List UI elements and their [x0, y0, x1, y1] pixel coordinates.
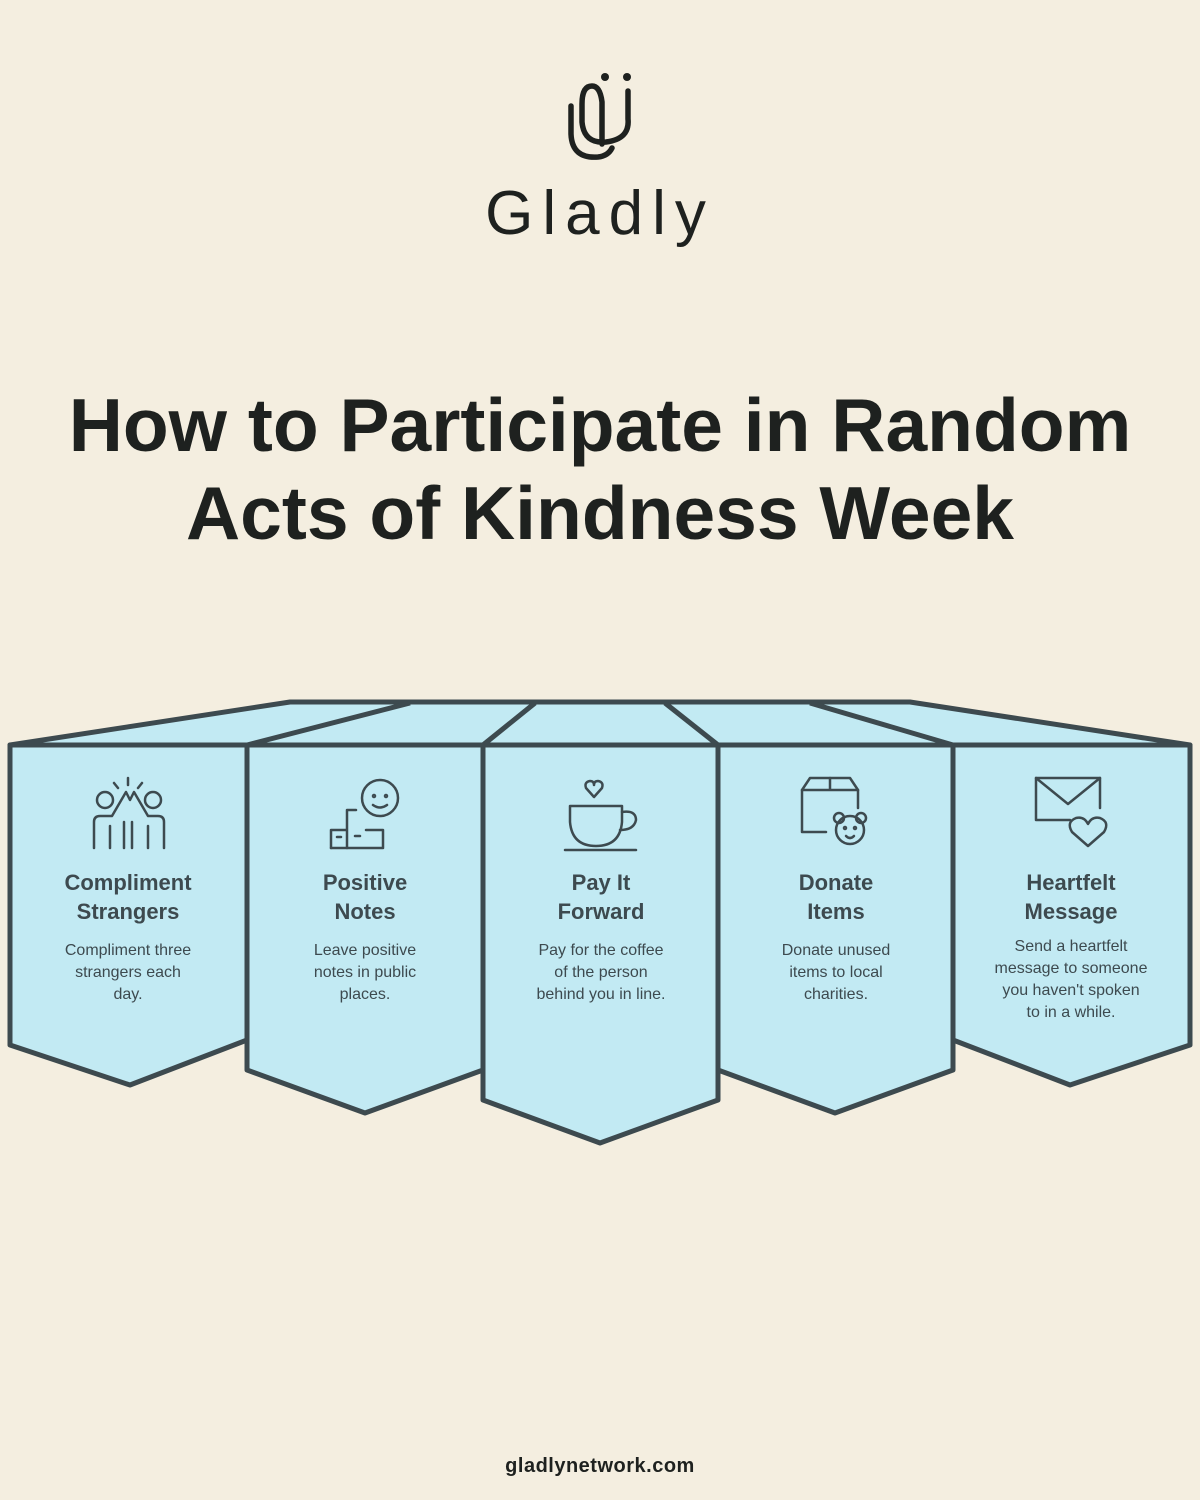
card 4 text	[782, 870, 890, 1003]
panel 3	[483, 745, 718, 1143]
title	[69, 383, 1131, 555]
card 5 text: Send a heartfelt	[1015, 938, 1127, 955]
logo mark	[568, 73, 631, 160]
card 3 text	[536, 870, 665, 1003]
panel 4	[718, 745, 953, 1113]
card 1 text: Compliment	[64, 870, 192, 895]
panel 2	[247, 745, 483, 1113]
card 2 text: Notes	[334, 899, 396, 924]
top surface	[10, 702, 1190, 745]
icon: coffee	[565, 781, 636, 850]
card 1 text: Compliment three	[65, 942, 191, 959]
card 1 text: day.	[113, 986, 143, 1003]
footer url: gladlynetwork.com	[505, 1455, 695, 1477]
icon: smiley note	[331, 780, 398, 848]
icon: donate box bear	[802, 778, 866, 844]
brand name: Gladly	[485, 179, 715, 248]
panel 1	[10, 745, 247, 1085]
icon: high five	[94, 778, 164, 848]
title: How to Participate in Random	[69, 383, 1131, 467]
card 5 text: Message	[1025, 899, 1117, 924]
card 4 text: Items	[807, 899, 865, 924]
card 3 text: Pay for the coffee	[538, 942, 664, 959]
card 3 text: of the person	[554, 964, 648, 981]
card 2 text: notes in public	[314, 964, 416, 981]
card 5 text: you haven't spoken	[1002, 982, 1140, 999]
card 2 text	[314, 870, 416, 1003]
card 3 text: Pay It	[572, 870, 630, 895]
card 4 text: Donate unused	[782, 942, 890, 959]
panels graphic	[8, 700, 1192, 1146]
card 1 text: Strangers	[77, 899, 179, 924]
card 4 text: items to local	[789, 964, 883, 981]
card 2 text: Leave positive	[314, 942, 416, 959]
card 4 text: charities.	[804, 986, 868, 1003]
card 3 text: behind you in line.	[536, 986, 665, 1003]
card 1 text: strangers each	[75, 964, 181, 981]
card 5 text: message to someone	[994, 960, 1147, 977]
icon: envelope heart	[1036, 778, 1106, 846]
card 1 text	[64, 870, 192, 1003]
card 2 text: places.	[340, 986, 390, 1003]
card 4 text: Donate	[799, 870, 873, 895]
card 5 text: to in a while.	[1027, 1004, 1115, 1021]
title: Acts of Kindness Week	[186, 471, 1014, 555]
card 5 text	[994, 870, 1147, 1021]
panel 5	[953, 745, 1190, 1085]
card 3 text: Forward	[558, 899, 644, 924]
card 2 text: Positive	[323, 870, 407, 895]
card 5 text: Heartfelt	[1026, 870, 1116, 895]
